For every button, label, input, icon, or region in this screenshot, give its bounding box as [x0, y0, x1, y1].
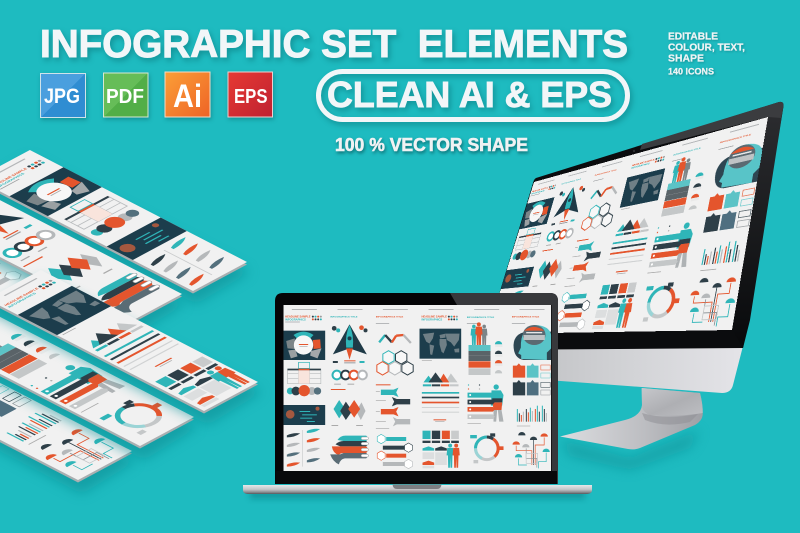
pill badge: clean ai and eps: CLEAN AI & EPS: [327, 74, 612, 115]
subtitle: 100 % VECTOR SHAPE: [335, 134, 528, 155]
laptop shadow: [250, 490, 585, 499]
icon: pdf: PDF: [106, 85, 144, 108]
iso strip: column 2: [0, 182, 185, 336]
monitor bezel: [482, 102, 784, 350]
iso strip: column 4: [0, 270, 262, 425]
monitor screen: [500, 117, 768, 333]
iso strip: column 3: [0, 163, 32, 312]
icon: ai: [165, 72, 210, 117]
iso strip: column 1: [0, 150, 250, 304]
icon: eps: EPS: [234, 86, 268, 108]
iso strip: column 6: [0, 339, 136, 494]
bezel reflection: [640, 102, 784, 150]
laptop screen: [284, 305, 552, 471]
feature list: 140 ICONS: [668, 66, 714, 76]
feature list: EDITABLE: [668, 30, 718, 42]
feature list: [668, 30, 745, 76]
bezel right side: [732, 106, 784, 348]
monitor stand shadow: [560, 430, 700, 470]
feature list: SHAPE: [668, 52, 704, 64]
title: INFOGRAPHIC SET ELEMENTS: [40, 23, 628, 66]
feature list: COLOUR, TEXT,: [668, 42, 745, 54]
monitor chin: [480, 345, 743, 393]
icon: eps: [228, 72, 272, 117]
iso strip: column 5: [0, 305, 198, 460]
icon: pdf: [104, 73, 148, 117]
monitor stand: [560, 388, 703, 449]
webcam: [633, 150, 635, 152]
icon: ai: Ai: [173, 78, 202, 114]
icon: jpg: JPG: [44, 85, 80, 108]
icon: jpg: [40, 74, 86, 118]
laptop lid: [275, 293, 558, 484]
laptop base: [243, 484, 592, 494]
